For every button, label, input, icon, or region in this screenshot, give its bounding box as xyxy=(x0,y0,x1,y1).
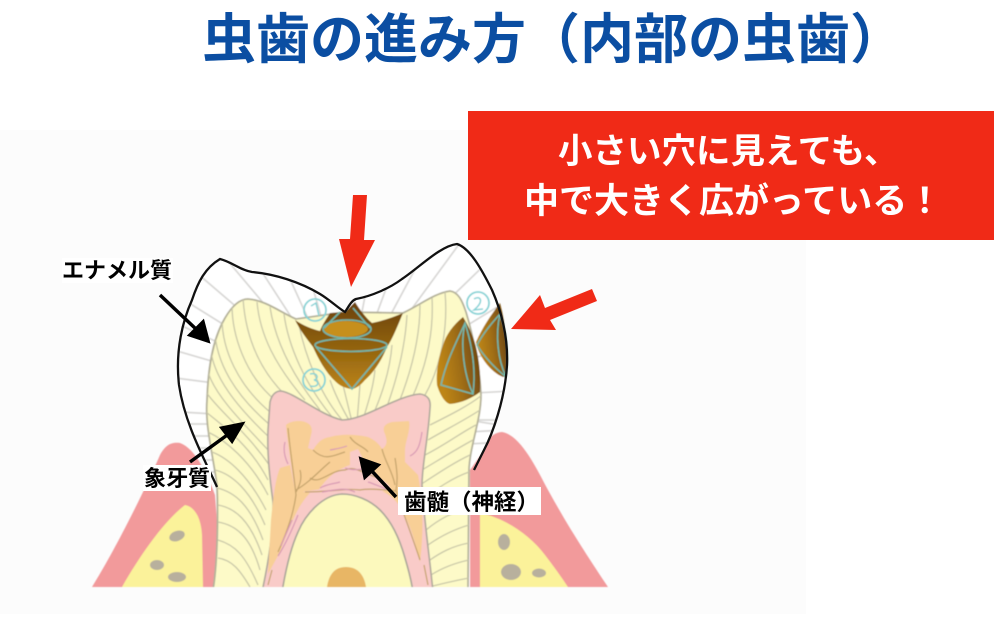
pulp nerve tissue xyxy=(286,421,409,492)
enamel xyxy=(180,246,504,588)
title: 虫歯の進み方（内部の虫歯） xyxy=(202,10,904,70)
arrow: enamel xyxy=(160,295,208,341)
callout banner xyxy=(468,111,994,240)
pulp central pink area xyxy=(318,449,390,492)
occlusal cavity xyxy=(295,302,403,389)
right gum xyxy=(464,432,608,587)
label: pulp: 歯髄（神経） xyxy=(404,490,539,515)
right jaw bone xyxy=(480,513,568,587)
left gum xyxy=(92,443,222,587)
arrow: top cavity xyxy=(339,195,375,287)
pulp right root band xyxy=(380,462,422,562)
pulp vessels xyxy=(268,428,428,585)
cavity cone guide lines xyxy=(315,308,387,389)
pulp left root band xyxy=(268,465,310,574)
label: enamel: エナメル質 xyxy=(62,258,172,283)
illustration background xyxy=(0,130,806,614)
tooth outer outline xyxy=(178,244,507,487)
arrow: dentin xyxy=(190,424,242,462)
pulp root canal xyxy=(282,494,413,592)
pulp chamber xyxy=(262,391,433,592)
callout banner: 中で大きく広がっている！ xyxy=(524,182,942,221)
root apex xyxy=(327,567,366,587)
tooth cross-section illustration xyxy=(92,230,608,592)
markers 1 2 3 xyxy=(303,292,489,391)
side cavities xyxy=(437,303,507,404)
arrow: side cavity xyxy=(511,289,597,330)
arrow: pulp xyxy=(361,459,396,497)
label: dentin: 象牙質 xyxy=(144,466,210,491)
left jaw bone xyxy=(122,505,203,587)
dentin xyxy=(206,291,482,590)
callout banner: 小さい穴に見えても、 xyxy=(558,133,899,171)
